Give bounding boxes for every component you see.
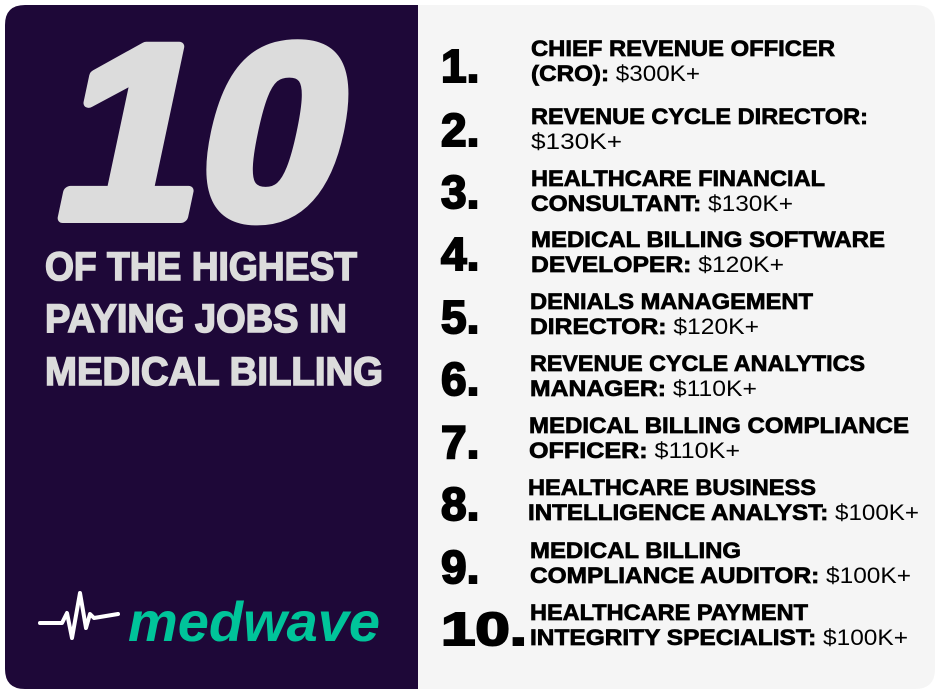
item 7 [441, 413, 909, 468]
logo: medwave: medwave [128, 590, 380, 653]
item 7: 7. [441, 416, 479, 468]
item 7: OFFICER: $110K+ [529, 438, 740, 463]
item 8: INTELLIGENCE ANALYST: $100K+ [528, 500, 919, 525]
item 9 [441, 538, 911, 593]
item 8: 8. [441, 478, 479, 530]
list of jobs [441, 36, 919, 655]
item 5: DENIALS MANAGEMENT [530, 289, 814, 314]
item 6: REVENUE CYCLE ANALYTICS [530, 351, 865, 376]
item 5: 5. [441, 291, 479, 343]
subtitle: OF THE HIGHEST [45, 245, 357, 289]
item 1: CHIEF REVENUE OFFICER [531, 36, 835, 61]
item 9: MEDICAL BILLING [530, 538, 741, 563]
item 10: 10. [441, 603, 527, 655]
panel: left title panel [5, 0, 418, 689]
item 2 [441, 104, 868, 156]
item 4: DEVELOPER: $120K+ [531, 252, 784, 277]
subtitle: MEDICAL BILLING [45, 350, 383, 394]
item 1: (CRO): $300K+ [531, 61, 700, 86]
item 6: 6. [441, 353, 479, 405]
item 6: MANAGER: $110K+ [530, 376, 757, 401]
subtitle: PAYING JOBS IN [45, 297, 347, 341]
item 6 [441, 351, 865, 405]
panel: right list background [410, 5, 935, 689]
item 7: MEDICAL BILLING COMPLIANCE [529, 413, 909, 438]
item 9: 9. [441, 541, 479, 593]
item 4: MEDICAL BILLING SOFTWARE [531, 227, 885, 252]
icon: heartbeat wave [40, 593, 118, 638]
item 5 [441, 289, 814, 343]
item 1 [441, 36, 835, 92]
item 2: 2. [441, 104, 479, 156]
item 10: INTEGRITY SPECIALIST: $100K+ [530, 625, 908, 650]
item 1: 1. [441, 40, 479, 92]
item 8 [441, 475, 919, 530]
item 9: COMPLIANCE AUDITOR: $100K+ [530, 563, 911, 588]
item 10 [441, 600, 908, 655]
item 4: 4. [441, 228, 479, 280]
subtitle [45, 245, 383, 394]
item 10: HEALTHCARE PAYMENT [530, 600, 809, 625]
item 5: DIRECTOR: $120K+ [530, 314, 759, 339]
item 8: HEALTHCARE BUSINESS [528, 475, 816, 500]
item 3 [441, 166, 825, 218]
item 3: CONSULTANT: $130K+ [531, 191, 793, 216]
item 2: $130K+ [531, 129, 622, 154]
item 2: REVENUE CYCLE DIRECTOR: [531, 104, 868, 129]
item 3: 3. [441, 166, 479, 218]
item 3: HEALTHCARE FINANCIAL [531, 166, 825, 191]
big number 10: 10 [37, 0, 377, 269]
item 4 [441, 227, 885, 280]
